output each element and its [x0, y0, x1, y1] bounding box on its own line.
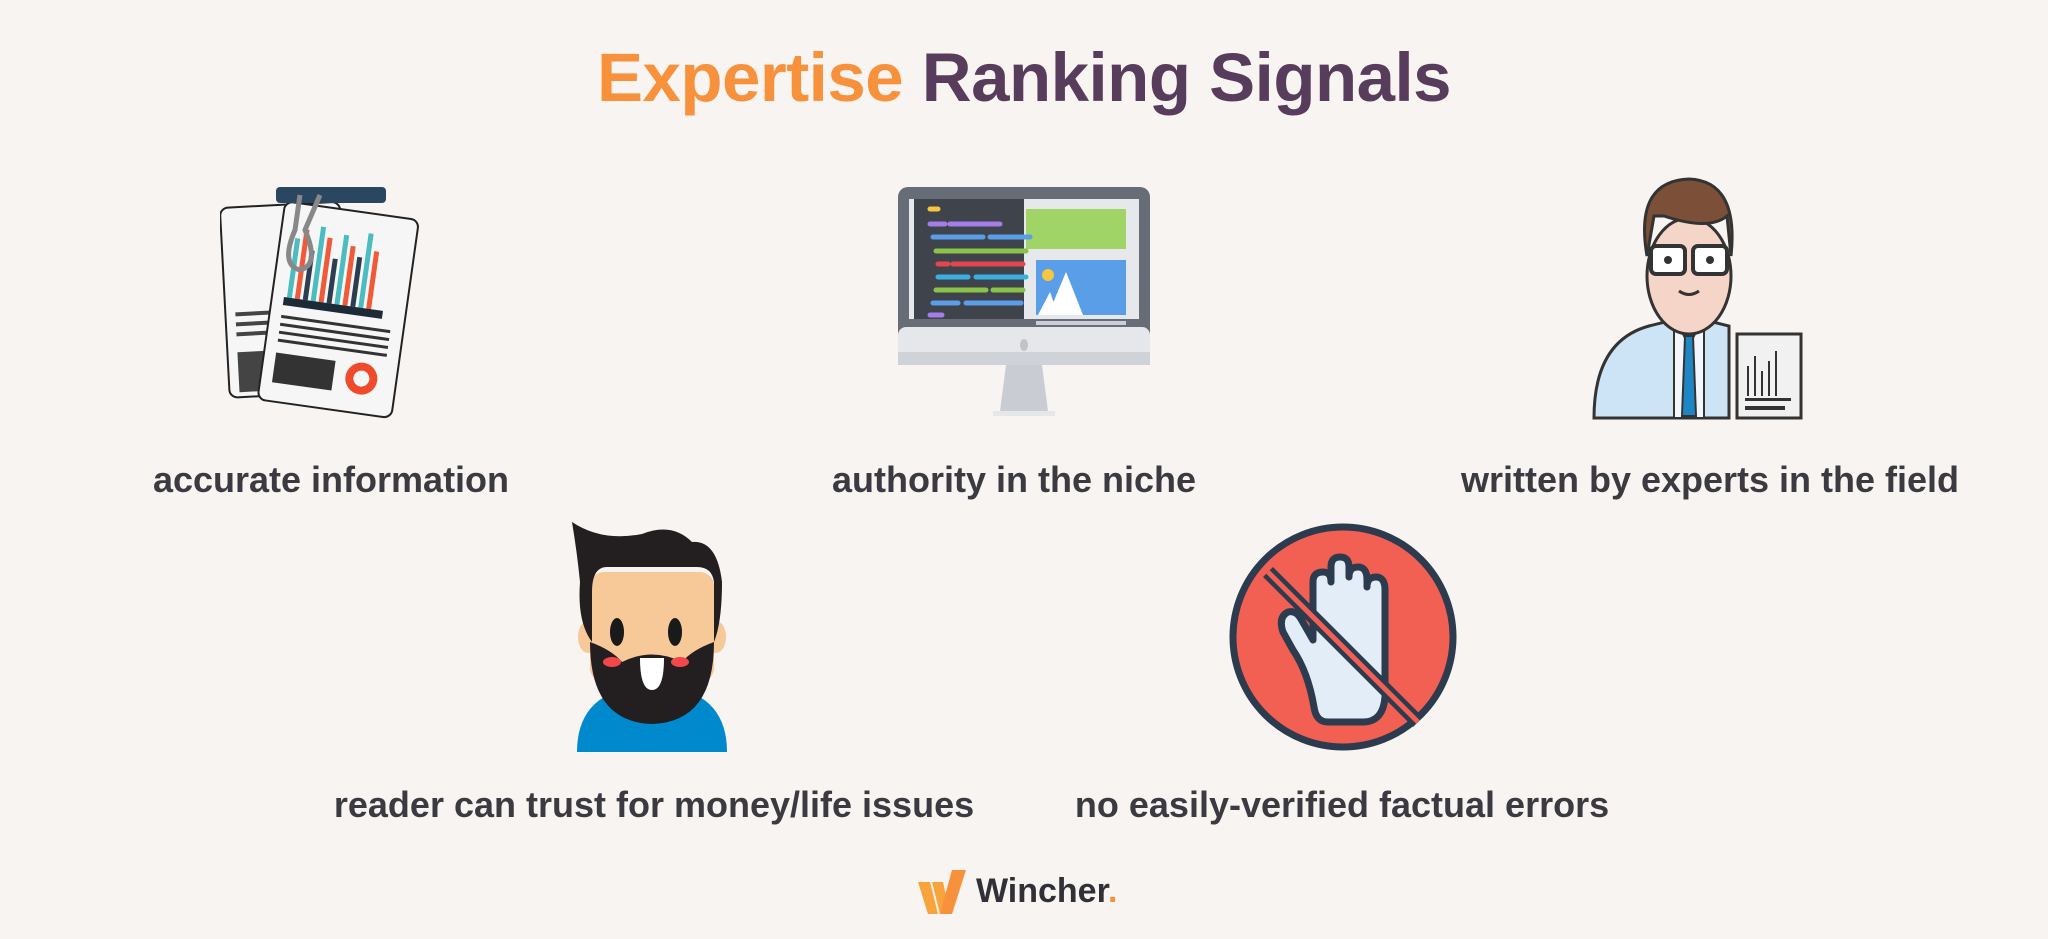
icon: bearded man	[572, 522, 727, 752]
label: no factual errors: no easily-verified factual errors	[1075, 784, 1609, 825]
label: written by experts: written by experts in the field	[1461, 459, 1959, 500]
label: authority in the niche: authority in the niche	[832, 459, 1196, 500]
icon: documents	[220, 187, 419, 418]
icon: stop hand	[1230, 524, 1456, 750]
icon: expert	[1592, 178, 1802, 420]
label: reader can trust: reader can trust for money/life issues	[334, 784, 974, 825]
label: accurate information: accurate information	[153, 459, 509, 500]
logo: Wincher	[918, 870, 1117, 914]
logo: Wincher: Wincher.	[976, 872, 1117, 910]
title: Expertise Ranking Signals	[597, 39, 1451, 116]
icon: monitor	[898, 187, 1150, 416]
